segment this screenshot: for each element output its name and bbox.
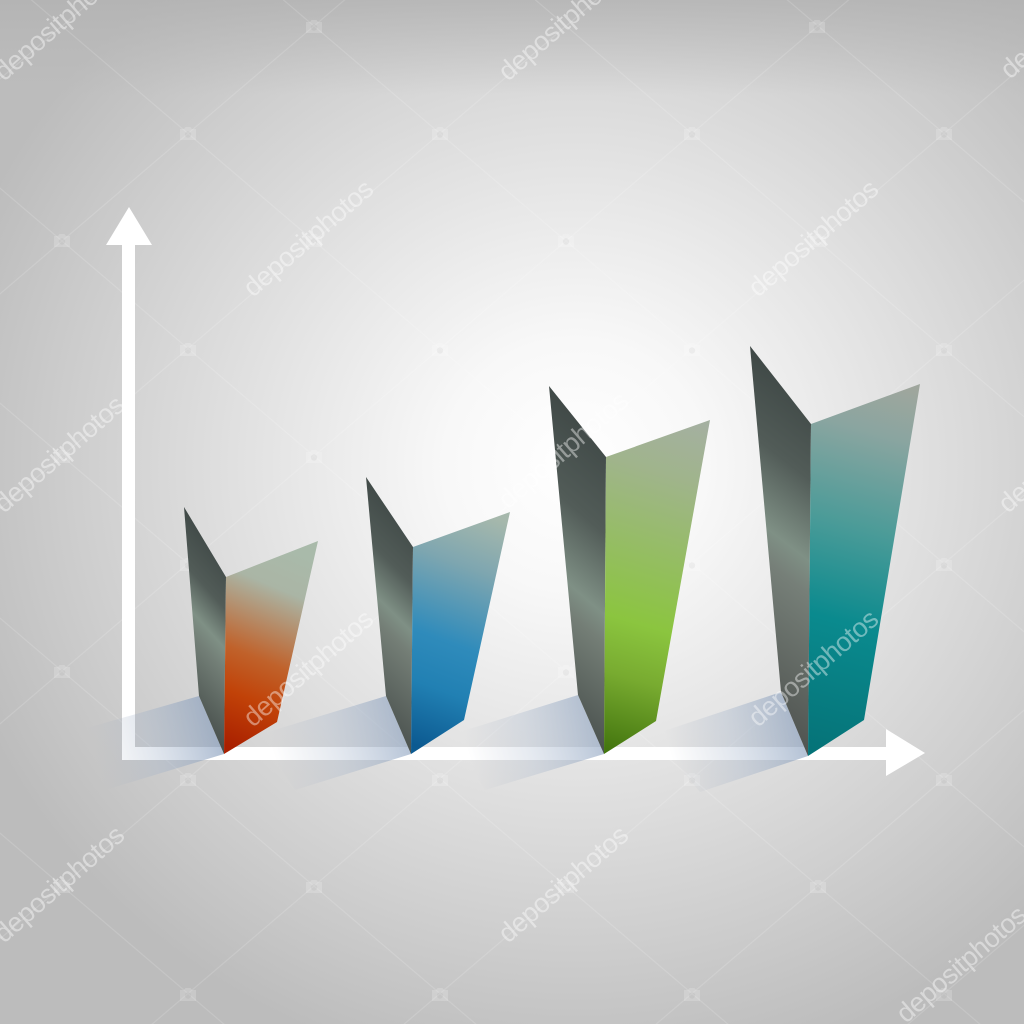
watermark text over the chart: depositphotos bbox=[492, 386, 634, 515]
bar 1: orange bbox=[184, 507, 318, 754]
shadow bar 3 bbox=[450, 695, 604, 790]
axes bbox=[106, 207, 925, 776]
shadow bar 2 bbox=[258, 696, 411, 790]
bar 4: teal bbox=[750, 346, 920, 756]
watermark text over the chart: depositphotos bbox=[742, 604, 884, 733]
watermark text behind the chart: depositphotos bbox=[742, 174, 884, 303]
bar 2: blue bbox=[366, 477, 510, 754]
x axis arrow bbox=[122, 729, 925, 776]
watermark text over the chart: depositphotos bbox=[237, 604, 379, 733]
shadow bar 4 bbox=[652, 692, 808, 792]
watermark text over the chart bbox=[237, 386, 884, 733]
bar 3: green bbox=[549, 386, 710, 754]
watermark text behind the chart: depositphotos bbox=[492, 820, 634, 949]
top dark band bbox=[0, 0, 1024, 95]
watermark text behind the chart: depositphotos bbox=[237, 174, 379, 303]
bar shadows bbox=[80, 692, 808, 792]
y axis arrow bbox=[106, 207, 152, 759]
shadow bar 1 bbox=[80, 696, 224, 790]
